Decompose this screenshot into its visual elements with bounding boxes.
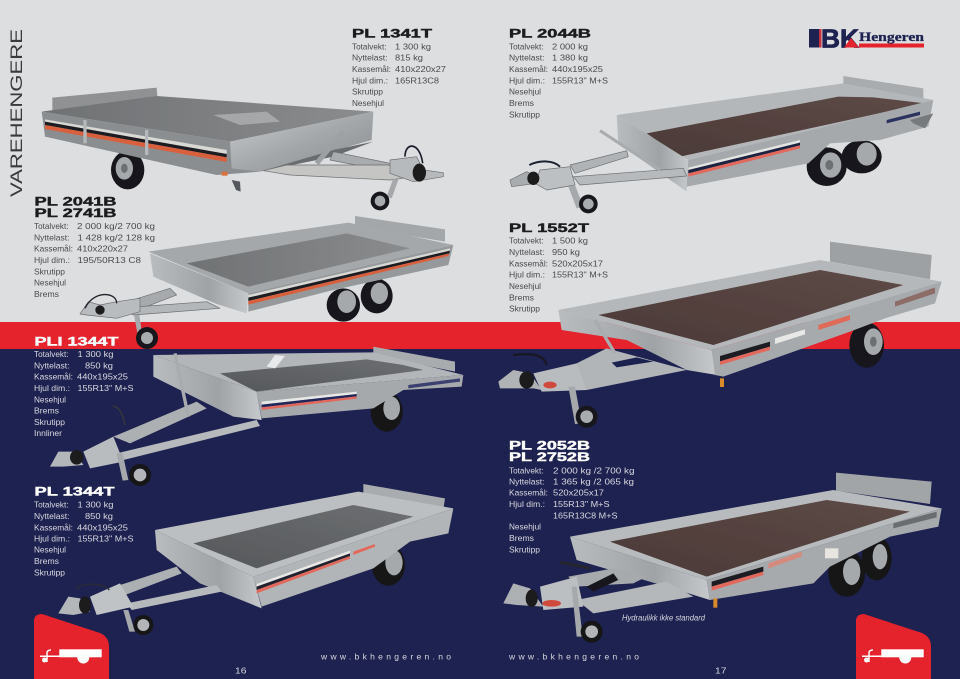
note: hydraulics: Hydraulikk ikke standard	[622, 612, 705, 622]
spec block: PL 2041B / PL 2741B: PL 2741B	[34, 208, 116, 220]
spec block: PL 2041B / PL 2741B: Brems	[34, 289, 59, 299]
spec block: PL 1341T	[352, 29, 446, 108]
spec block: PL 2041B / PL 2741B: Skrutipp	[34, 266, 65, 276]
spec block: PL 2052B / PL 2752B	[509, 441, 635, 554]
spec block: PL 2044B: Kassemål:	[509, 64, 548, 74]
spec block: PL 1344T: 1 300 kg	[78, 500, 114, 510]
spec block: PL 2052B / PL 2752B: 520x205x17	[553, 488, 604, 498]
spec block: PLI 1344T	[34, 336, 134, 438]
spec block: PL 1341T: Totalvekt:	[352, 41, 386, 51]
logo: BK Hengeren: BK	[821, 24, 859, 54]
spec block: PLI 1344T: Innliner	[34, 428, 62, 438]
spec block: PL 2044B: 2 000 kg	[552, 41, 588, 51]
spec block: PL 1341T: 1 300 kg	[395, 41, 431, 51]
spec block: PL 2052B / PL 2752B: 2 000 kg /2 700 kg	[553, 465, 635, 475]
spec block: PL 1552T: Nesehjul	[509, 281, 541, 291]
spec block: PL 2052B / PL 2752B: 155R13" M+S	[553, 499, 610, 509]
spec block: PL 2044B: Nesehjul	[509, 87, 541, 97]
spec block: PL 1344T: PL 1344T	[34, 486, 114, 498]
spec block: PL 1344T: Nesehjul	[34, 545, 66, 555]
spec block: PLI 1344T: 440x195x25	[77, 372, 128, 382]
website url: left page: www.bkhengeren.no	[320, 652, 451, 662]
spec block: PLI 1344T: Hjul dim.:	[34, 383, 70, 393]
logo: BK Hengeren	[809, 24, 925, 54]
spec block: PL 2052B / PL 2752B: PL 2052B	[509, 441, 590, 453]
spec block: PL 2052B / PL 2752B: Nyttelast:	[509, 476, 544, 486]
spec block: PL 1344T: Totalvekt:	[34, 500, 68, 510]
spec block: PL 2052B / PL 2752B: Nesehjul	[509, 522, 541, 532]
spec block: PL 2041B / PL 2741B: Kassemål:	[34, 244, 73, 254]
spec block: PL 1344T: 155R13" M+S	[78, 534, 134, 544]
spec block: PLI 1344T: 155R13" M+S	[78, 383, 134, 393]
spec block: PL 2041B / PL 2741B: Hjul dim.:	[34, 255, 70, 265]
spec block: PL 2044B: PL 2044B	[509, 29, 591, 41]
spec block: PL 1552T: Nyttelast:	[509, 247, 544, 257]
spec block: PL 2052B / PL 2752B: 165R13C8 M+S	[553, 510, 618, 520]
spec block: PLI 1344T: 1 300 kg	[78, 349, 114, 359]
spec block: PL 2044B: Hjul dim.:	[509, 75, 545, 85]
spec block: PL 1341T: Kassemål:	[352, 64, 391, 74]
website url: right page: www.bkhengeren.no	[508, 652, 639, 662]
spec block: PLI 1344T: Totalvekt:	[34, 349, 68, 359]
spec block: PL 1552T: Skrutipp	[509, 304, 540, 314]
spec block: PL 2041B / PL 2741B: 2 000 kg/2 700 kg	[77, 221, 155, 231]
trailer photo: PLI 1344T	[50, 347, 463, 486]
spec block: PL 2052B / PL 2752B: Kassemål:	[509, 488, 548, 498]
vertical section title: VAREHENGERE	[8, 29, 26, 197]
red tab with trailer icon: right page	[856, 614, 931, 679]
spec block: PL 1552T: Kassemål:	[509, 258, 548, 268]
spec block: PL 2044B: Nyttelast:	[509, 53, 544, 63]
spec block: PL 1552T: 520x205x17	[552, 258, 603, 268]
trailer photo: PL 2044B	[510, 76, 933, 213]
spec block: PL 1341T: 815 kg	[395, 53, 423, 63]
spec block: PL 1552T: 1 500 kg	[552, 236, 588, 246]
spec block: PL 1344T: Nyttelast:	[34, 511, 70, 521]
spec block: PLI 1344T: Brems	[34, 406, 59, 416]
spec block: PL 1341T: Hjul dim.:	[352, 75, 388, 85]
spec block: PL 1344T: 850 kg	[85, 511, 113, 521]
spec block: PLI 1344T: PLI 1344T	[34, 336, 118, 348]
spec block: PL 1341T: Nyttelast:	[352, 53, 388, 63]
spec block: PL 2041B / PL 2741B: 410x220x27	[77, 244, 128, 254]
spec block: PL 2044B: 1 380 kg	[552, 53, 588, 63]
spec block: PL 1552T: 950 kg	[552, 247, 580, 257]
spec block: PL 1552T: Totalvekt:	[509, 236, 544, 246]
spec block: PL 1552T: 155R13" M+S	[552, 270, 608, 280]
trailer photo: PL 1552T	[498, 242, 942, 428]
background: red band	[0, 322, 960, 349]
spec block: PL 2041B / PL 2741B: PL 2041B	[34, 197, 116, 209]
spec block: PLI 1344T: Nyttelast:	[34, 360, 70, 370]
spec block: PL 2052B / PL 2752B: Skrutipp	[509, 544, 540, 554]
spec block: PL 1552T	[509, 223, 608, 314]
spec block: PL 2044B: Totalvekt:	[509, 41, 544, 51]
spec block: PL 2052B / PL 2752B: Totalvekt:	[509, 465, 544, 475]
spec block: PL 2052B / PL 2752B: PL 2752B	[509, 452, 590, 464]
red tab with trailer icon: left page	[34, 614, 109, 679]
trailer photo: PL 1341T	[42, 88, 443, 210]
spec block: PL 2052B / PL 2752B: Brems	[509, 533, 534, 543]
background: navy lower area	[0, 349, 960, 679]
spec block: PL 1341T: 410x220x27	[395, 64, 446, 74]
page number 17: 17	[715, 666, 727, 676]
trailer photo: PL 1344T	[58, 484, 453, 635]
spec block: PL 1344T: Skrutipp	[34, 567, 65, 577]
spec block: PL 1344T	[34, 486, 134, 577]
spec block: PL 1341T: Nesehjul	[352, 98, 384, 108]
page number 16: 16	[235, 666, 247, 676]
spec block: PL 2044B	[509, 29, 608, 119]
spec block: PL 2044B: 440x195x25	[552, 64, 603, 74]
spec block: PL 2041B / PL 2741B	[34, 197, 155, 299]
spec block: PL 2041B / PL 2741B: 195/50R13 C8	[78, 255, 141, 265]
spec block: PL 2052B / PL 2752B: 1 365 kg /2 065 kg	[553, 476, 634, 486]
spec block: PLI 1344T: 850 kg	[85, 360, 113, 370]
spec block: PL 2044B: Brems	[509, 98, 534, 108]
spec block: PL 1341T: Skrutipp	[352, 87, 383, 97]
spec block: PL 2041B / PL 2741B: Totalvekt:	[34, 221, 68, 231]
spec block: PL 2041B / PL 2741B: Nesehjul	[34, 278, 66, 288]
logo: BK Hengeren: Hengeren	[859, 29, 925, 44]
spec block: PL 1344T: Kassemål:	[34, 522, 73, 532]
trailer photo: PL 2052B / 2752B	[503, 473, 942, 643]
spec block: PL 1341T: 165R13C8	[395, 75, 439, 85]
background: grey upper area	[0, 0, 960, 322]
spec block: PL 2052B / PL 2752B: Hjul dim.:	[509, 499, 545, 509]
spec block: PL 1552T: Hjul dim.:	[509, 270, 545, 280]
trailer photo: PL 2041B / 2741B	[80, 216, 453, 349]
spec block: PL 1344T: Hjul dim.:	[34, 534, 70, 544]
spec block: PL 1552T: Brems	[509, 292, 534, 302]
spec block: PL 1552T: PL 1552T	[509, 223, 589, 235]
spec block: PL 2044B: Skrutipp	[509, 109, 540, 119]
spec block: PL 2041B / PL 2741B: 1 428 kg/2 128 kg	[78, 232, 155, 242]
spec block: PLI 1344T: Skrutipp	[34, 417, 65, 427]
spec block: PL 1341T: PL 1341T	[352, 29, 432, 41]
spec block: PLI 1344T: Nesehjul	[34, 394, 66, 404]
spec block: PL 2044B: 155R13" M+S	[552, 75, 608, 85]
spec block: PL 1344T: Brems	[34, 556, 59, 566]
spec block: PLI 1344T: Kassemål:	[34, 372, 73, 382]
spec block: PL 1344T: 440x195x25	[77, 522, 128, 532]
spec block: PL 2041B / PL 2741B: Nyttelast:	[34, 232, 70, 242]
